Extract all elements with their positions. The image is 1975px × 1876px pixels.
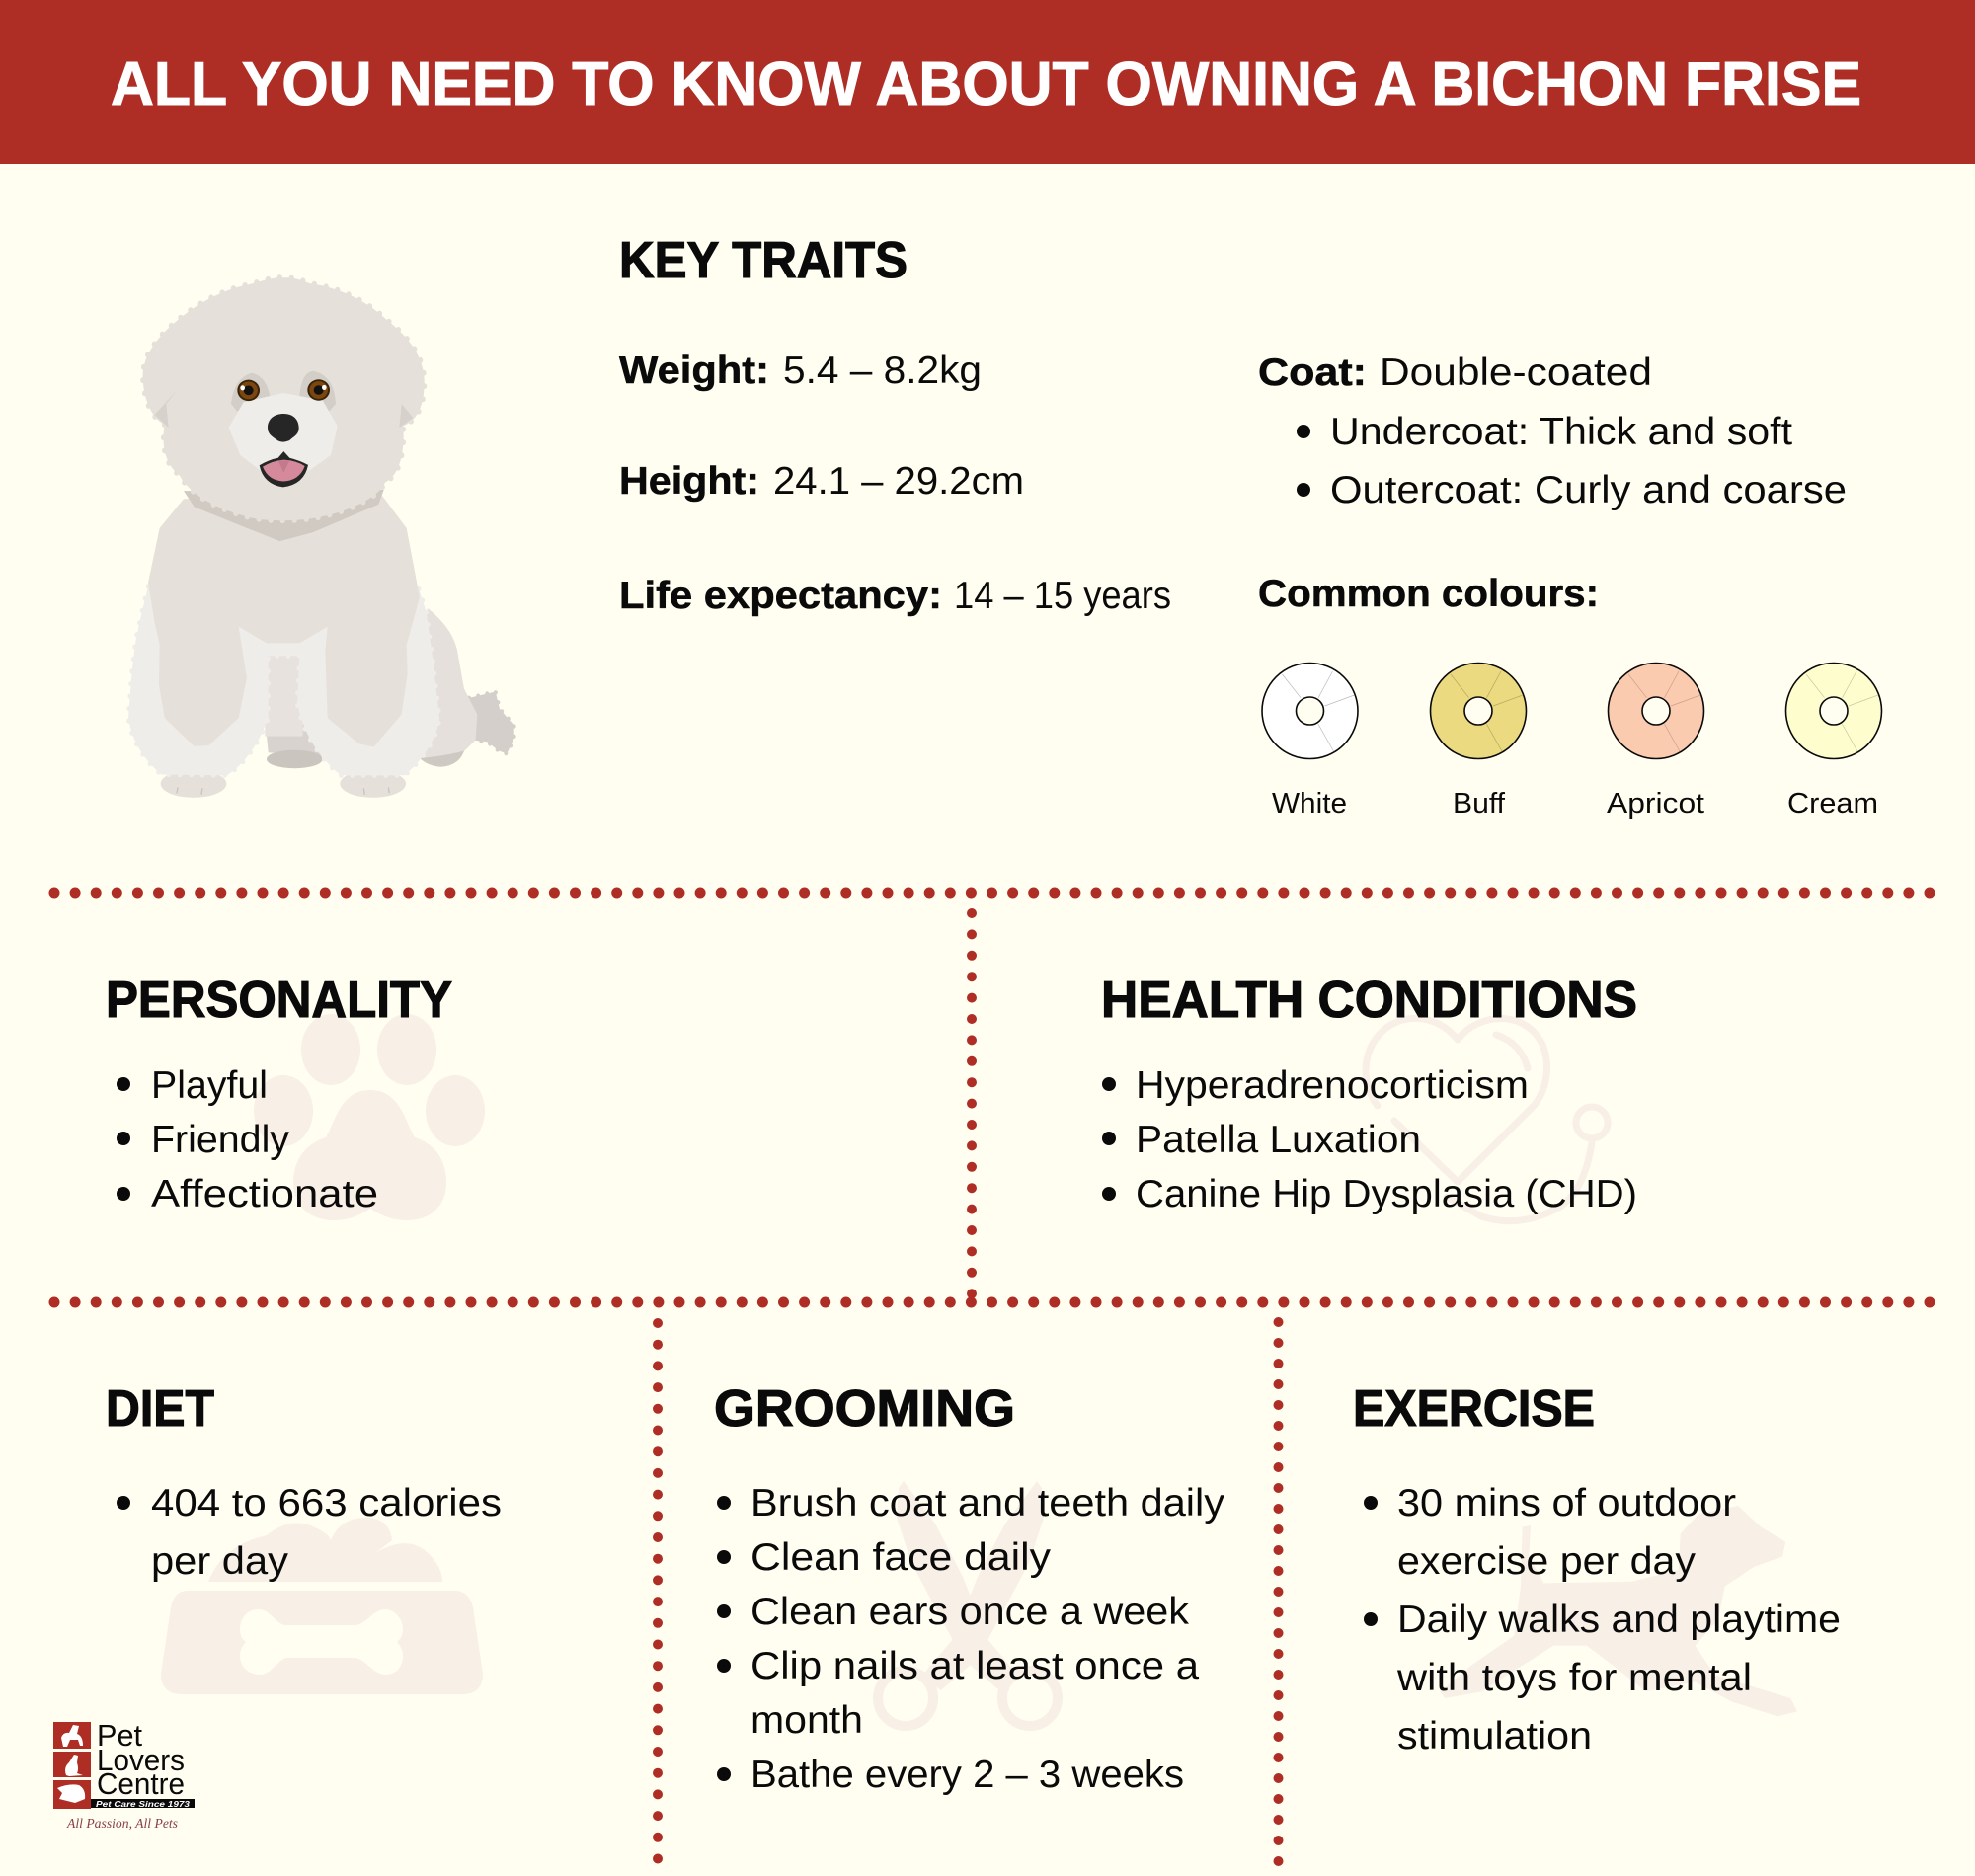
trait: height xyxy=(619,460,1024,503)
list: grooming: Clean ears once a week xyxy=(750,1591,1190,1633)
swatch labels: Apricot xyxy=(1607,788,1704,820)
list: grooming: Clip nails at least once a xyxy=(750,1645,1199,1687)
list: exercise xyxy=(1364,1482,1841,1758)
logo: Pet Lovers Centre: Pet xyxy=(97,1718,142,1753)
trait: coat: Outercoat: Curly and coarse xyxy=(1330,469,1847,511)
list: exercise: stimulation xyxy=(1397,1715,1592,1758)
swatch labels: White xyxy=(1272,788,1347,820)
list: health conditions: Canine Hip Dysplasia (CHD) xyxy=(1136,1173,1637,1215)
icon: nose xyxy=(268,414,299,442)
list: diet: 404 to 663 calories xyxy=(151,1482,502,1524)
watermark: scissors xyxy=(878,1481,1058,1726)
heading: key traits: KEY TRAITS xyxy=(619,232,908,289)
logo: Pet Lovers Centre xyxy=(53,1718,195,1832)
list: personality traits xyxy=(117,1064,378,1215)
list: health conditions: Hyperadrenocorticism xyxy=(1136,1064,1529,1107)
list: grooming: Bathe every 2 – 3 weeks xyxy=(750,1754,1184,1796)
watermark: heart stethoscope xyxy=(1366,1018,1608,1221)
trait: coat: Double-coated xyxy=(1380,352,1652,394)
list: exercise: with toys for mental xyxy=(1396,1657,1752,1699)
trait: coat: Undercoat: Thick and soft xyxy=(1330,411,1792,453)
heading: grooming: GROOMING xyxy=(714,1380,1015,1438)
trait: weight xyxy=(619,350,982,392)
heading: common colours: Common colours: xyxy=(1258,573,1599,615)
list: grooming: Clean face daily xyxy=(750,1536,1052,1579)
trait: weight: Weight: xyxy=(619,350,769,392)
header banner xyxy=(0,0,1975,164)
trait: coat: Coat: xyxy=(1258,352,1367,394)
icon: eyes xyxy=(237,379,330,401)
trait: height: Height: xyxy=(619,460,759,503)
heading: personality: PERSONALITY xyxy=(106,972,452,1029)
logo: Pet Lovers Centre: All Passion, All Pets xyxy=(66,1817,179,1832)
logo: Pet Lovers Centre: Lovers xyxy=(97,1743,185,1777)
list: personality traits: Friendly xyxy=(151,1119,289,1161)
icon: mouth xyxy=(260,451,308,487)
swatch labels: Buff xyxy=(1453,788,1506,820)
list: exercise: Daily walks and playtime xyxy=(1397,1599,1841,1641)
list: health conditions xyxy=(1102,1064,1637,1215)
watermark: paw xyxy=(254,1014,485,1220)
swatch: cream xyxy=(1785,664,1882,758)
list: personality traits: Affectionate xyxy=(151,1173,378,1215)
trait: life expectancy xyxy=(619,575,1171,617)
list: diet xyxy=(117,1482,502,1583)
swatch: white xyxy=(1262,664,1358,758)
logo: Pet Lovers Centre: Pet Care Since 1973 xyxy=(96,1799,190,1809)
watermark: food bowl xyxy=(161,1518,483,1694)
heading: diet: DIET xyxy=(106,1380,214,1438)
trait: life expectancy: 14 – 15 years xyxy=(954,575,1171,617)
watermark: running dog xyxy=(1440,1506,1797,1716)
list: grooming: Brush coat and teeth daily xyxy=(750,1482,1225,1524)
heading: exercise: EXERCISE xyxy=(1353,1380,1595,1438)
list: personality traits: Playful xyxy=(151,1064,268,1107)
heading: health conditions: HEALTH CONDITIONS xyxy=(1101,972,1637,1029)
swatch: apricot xyxy=(1608,664,1704,758)
list: exercise: exercise per day xyxy=(1397,1540,1697,1583)
swatch labels xyxy=(1272,788,1878,820)
trait: coat xyxy=(1258,352,1847,511)
list: grooming xyxy=(717,1482,1225,1796)
list: exercise: 30 mins of outdoor xyxy=(1397,1482,1736,1524)
list: health conditions: Patella Luxation xyxy=(1136,1119,1421,1161)
swatch: buff xyxy=(1430,664,1527,758)
title: ALL YOU NEED TO KNOW ABOUT OWNING A BICHON FRISE xyxy=(111,50,1861,118)
list: diet: per day xyxy=(151,1540,289,1583)
trait: life expectancy: Life expectancy: xyxy=(619,575,942,617)
trait: height: 24.1 – 29.2cm xyxy=(773,460,1024,503)
illustration: bichon frise dog xyxy=(128,277,514,798)
trait: weight: 5.4 – 8.2kg xyxy=(783,350,982,392)
swatch labels: Cream xyxy=(1787,788,1878,820)
logo: Pet Lovers Centre: Centre xyxy=(97,1766,185,1801)
list: grooming: month xyxy=(750,1699,863,1742)
